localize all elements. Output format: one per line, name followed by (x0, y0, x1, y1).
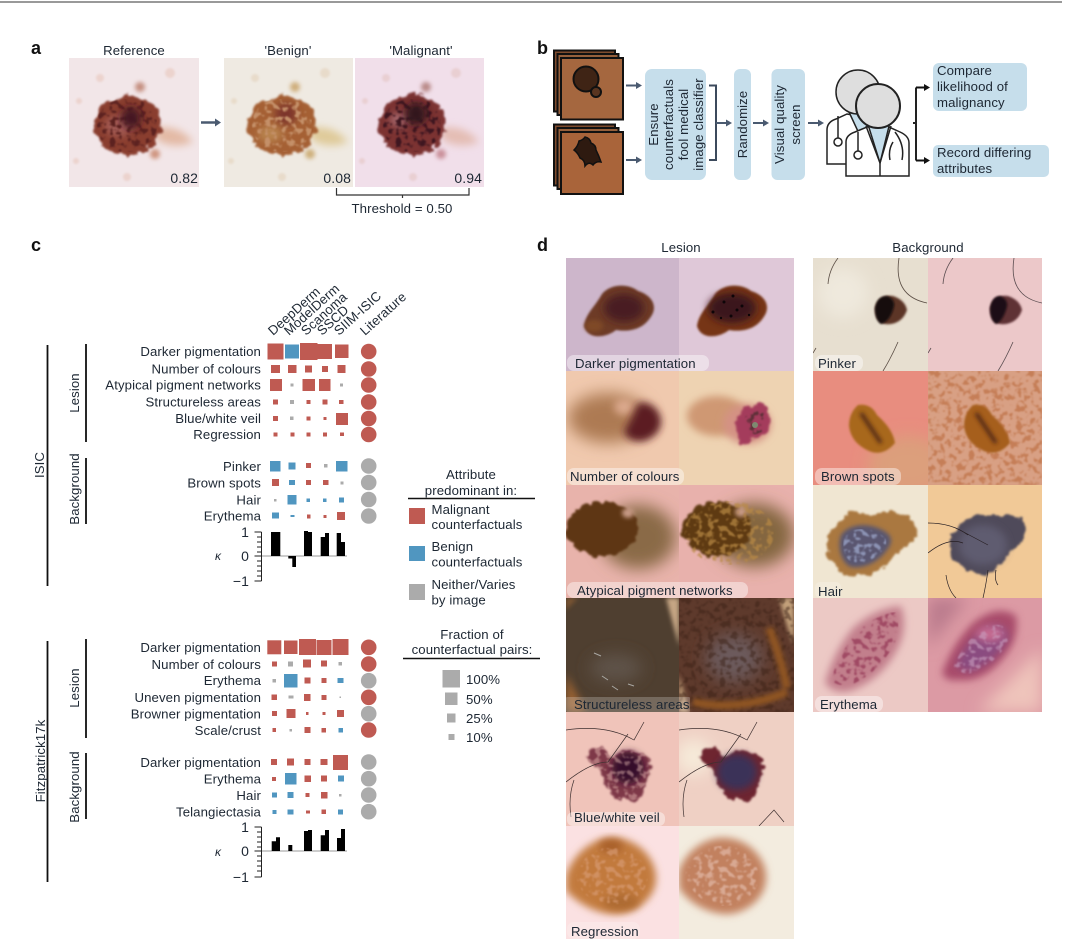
label pill: Hair (818, 584, 843, 599)
score: 0.08 (323, 170, 351, 186)
legend: attribute predominant (408, 467, 535, 608)
group: Fitzpatrick17k: Fitzpatrick17k (33, 719, 48, 802)
box: compare likelihood (933, 63, 1027, 111)
row labels: Hair (236, 788, 261, 803)
classifier column headers: SSCD (314, 302, 352, 338)
panel c: attribute matrix (31, 235, 540, 885)
icon: malignant image stack (554, 124, 623, 194)
row labels (131, 640, 262, 820)
row labels: Atypical pigment networks (105, 378, 261, 392)
panel d: example image pairs (537, 235, 1042, 939)
kappa bar chart: −1 (233, 869, 249, 885)
label pill: Atypical pigment networks (577, 583, 733, 598)
row labels: Scale/crust (195, 723, 261, 738)
row labels (105, 344, 262, 524)
legend: fraction of pairs: 100% (466, 672, 500, 687)
kappa bar chart: κ (215, 845, 222, 859)
classifier column headers: Literature (357, 289, 409, 338)
box: randomize: Randomize (735, 91, 750, 158)
row labels: Erythema (204, 673, 262, 688)
box: visual quality screen: screen (788, 104, 803, 145)
bracket arrows (913, 84, 930, 164)
label pill: Pinker (818, 356, 856, 371)
box: ensure counterfactuals: counterfactuals (661, 79, 676, 170)
legend: attribute predominant: Attribute (446, 467, 496, 482)
kappa bar chart (215, 524, 347, 589)
label pill: Regression (571, 924, 639, 939)
kappa bar chart (215, 819, 347, 885)
kappa bar chart: −1 (233, 573, 249, 589)
image pair: atypical pigment networks (566, 485, 794, 598)
panel a: counterfactual example (31, 38, 484, 216)
literature circles (361, 640, 377, 820)
kappa bar chart: 0 (241, 548, 249, 564)
box: ensure counterfactuals: fool medical (676, 89, 691, 160)
legend: fraction of pairs: 50% (466, 692, 493, 707)
group: Fitzpatrick17k: Lesion (67, 668, 82, 708)
legend: fraction of pairs: 25% (466, 711, 493, 726)
arrow (201, 121, 216, 124)
image pair: brown spots (813, 371, 1042, 496)
row labels: Regression (193, 427, 261, 442)
column heading: background: Background (892, 240, 964, 255)
box: ensure counterfactuals: image classifier (691, 78, 706, 171)
legend: attribute predominant: counterfactuals (432, 517, 523, 532)
score: 0.94 (454, 170, 482, 186)
legend: fraction of pairs: counterfactual pairs: (412, 642, 532, 657)
image titles: 'Benign' (265, 43, 311, 58)
kappa bar chart: κ (215, 549, 222, 563)
threshold label: Threshold = 0.50 (352, 201, 452, 216)
bracket arrow (709, 86, 732, 160)
dot matrix squares (267, 639, 348, 814)
label pill: Darker pigmentation (575, 356, 696, 371)
row labels: Brown spots (187, 476, 261, 490)
image pair: regression (566, 826, 794, 939)
arrow (808, 120, 824, 126)
legend: fraction of pairs (403, 627, 540, 745)
box: visual quality screen: Visual quality (772, 85, 787, 164)
image: reference lesion (69, 58, 199, 187)
image titles: Reference (103, 43, 165, 58)
row labels: Erythema (204, 772, 262, 786)
label pill: Number of colours (570, 469, 680, 484)
group: ISIC: Lesion (67, 373, 82, 413)
threshold bracket (336, 188, 469, 198)
icon: doctors (827, 70, 909, 176)
legend: attribute predominant: Benign (432, 539, 473, 554)
panel label d: d (537, 235, 548, 255)
image titles (103, 43, 453, 58)
label pill: Brown spots (821, 469, 895, 484)
row labels: Structureless areas (145, 394, 261, 410)
row labels: Darker pigmentation (140, 640, 261, 655)
arrow (753, 120, 769, 126)
group: ISIC: Background (67, 453, 82, 525)
arrows from stacks (626, 82, 642, 164)
image pair: erythema (813, 598, 1042, 712)
score: 0.82 (170, 170, 198, 186)
box: randomize (734, 69, 751, 180)
image pair: darker pigmentation (566, 258, 794, 371)
panel label c: c (31, 235, 41, 255)
classifier column headers (265, 281, 409, 338)
literature circles (361, 344, 377, 524)
label pill: Erythema (820, 697, 878, 712)
legend: attribute predominant: predominant in: (425, 483, 517, 498)
image pair: hair (813, 485, 1042, 599)
box: compare likelihood: Compare (937, 63, 992, 78)
row labels: Uneven pigmentation (134, 690, 261, 705)
box: compare likelihood: likelihood of (937, 79, 1008, 94)
column heading: lesion: Lesion (661, 240, 701, 255)
classifier column headers: SIIM-ISIC (331, 288, 384, 338)
group: Fitzpatrick17k (33, 639, 377, 885)
classifier column headers: Scanoma (298, 289, 350, 338)
box: record attributes (933, 145, 1049, 177)
image pair: blue/white veil (566, 712, 794, 826)
image: benign lesion (224, 58, 353, 187)
box: ensure counterfactuals (645, 69, 706, 180)
box: ensure counterfactuals: Ensure (646, 103, 661, 146)
panel label b: b (537, 38, 548, 58)
kappa bar chart: 1 (241, 524, 249, 540)
image pair: pinker (813, 258, 1042, 371)
image: malignant lesion (355, 58, 484, 187)
classifier column headers: ModelDerm (281, 281, 342, 338)
legend: attribute predominant: by image (432, 592, 486, 608)
image pair: structureless areas (566, 598, 794, 712)
label pill: Structureless areas (574, 697, 690, 712)
row labels: Browner pigmentation (131, 706, 261, 722)
panel b: study workflow (537, 38, 1049, 194)
panel label a: a (31, 38, 42, 58)
row labels: Hair (236, 492, 261, 508)
kappa bar chart: 1 (241, 819, 249, 835)
group: Fitzpatrick17k: Background (67, 751, 82, 823)
box: record attributes: Record differing (937, 145, 1031, 160)
legend: fraction of pairs: 10% (466, 730, 493, 745)
box: record attributes: attributes (937, 161, 993, 176)
kappa bar chart: 0 (241, 843, 249, 859)
group: ISIC: ISIC (32, 452, 47, 478)
row labels: Blue/white veil (175, 411, 261, 426)
image pair: number of colours (566, 371, 794, 485)
legend: fraction of pairs: Fraction of (440, 627, 504, 642)
dot matrix squares (268, 343, 348, 520)
arrow head (215, 118, 221, 126)
row labels: Erythema (204, 508, 262, 524)
legend: attribute predominant: Neither/Varies (432, 577, 516, 592)
box: compare likelihood: malignancy (937, 95, 1005, 110)
row labels: Number of colours (152, 657, 261, 672)
row labels: Pinker (223, 459, 262, 474)
row labels: Number of colours (152, 362, 261, 376)
row labels: Darker pigmentation (140, 755, 261, 770)
legend: attribute predominant: Malignant (432, 502, 490, 517)
box: visual quality screen (772, 69, 805, 180)
group: ISIC (32, 343, 377, 589)
image titles: 'Malignant' (389, 43, 453, 58)
row labels: Telangiectasia (176, 804, 262, 820)
classifier column headers: DeepDerm (265, 284, 323, 338)
row labels: Darker pigmentation (140, 344, 261, 359)
icon: benign image stack (554, 50, 623, 120)
label pill: Blue/white veil (574, 810, 660, 825)
legend: attribute predominant: counterfactuals (432, 554, 523, 570)
